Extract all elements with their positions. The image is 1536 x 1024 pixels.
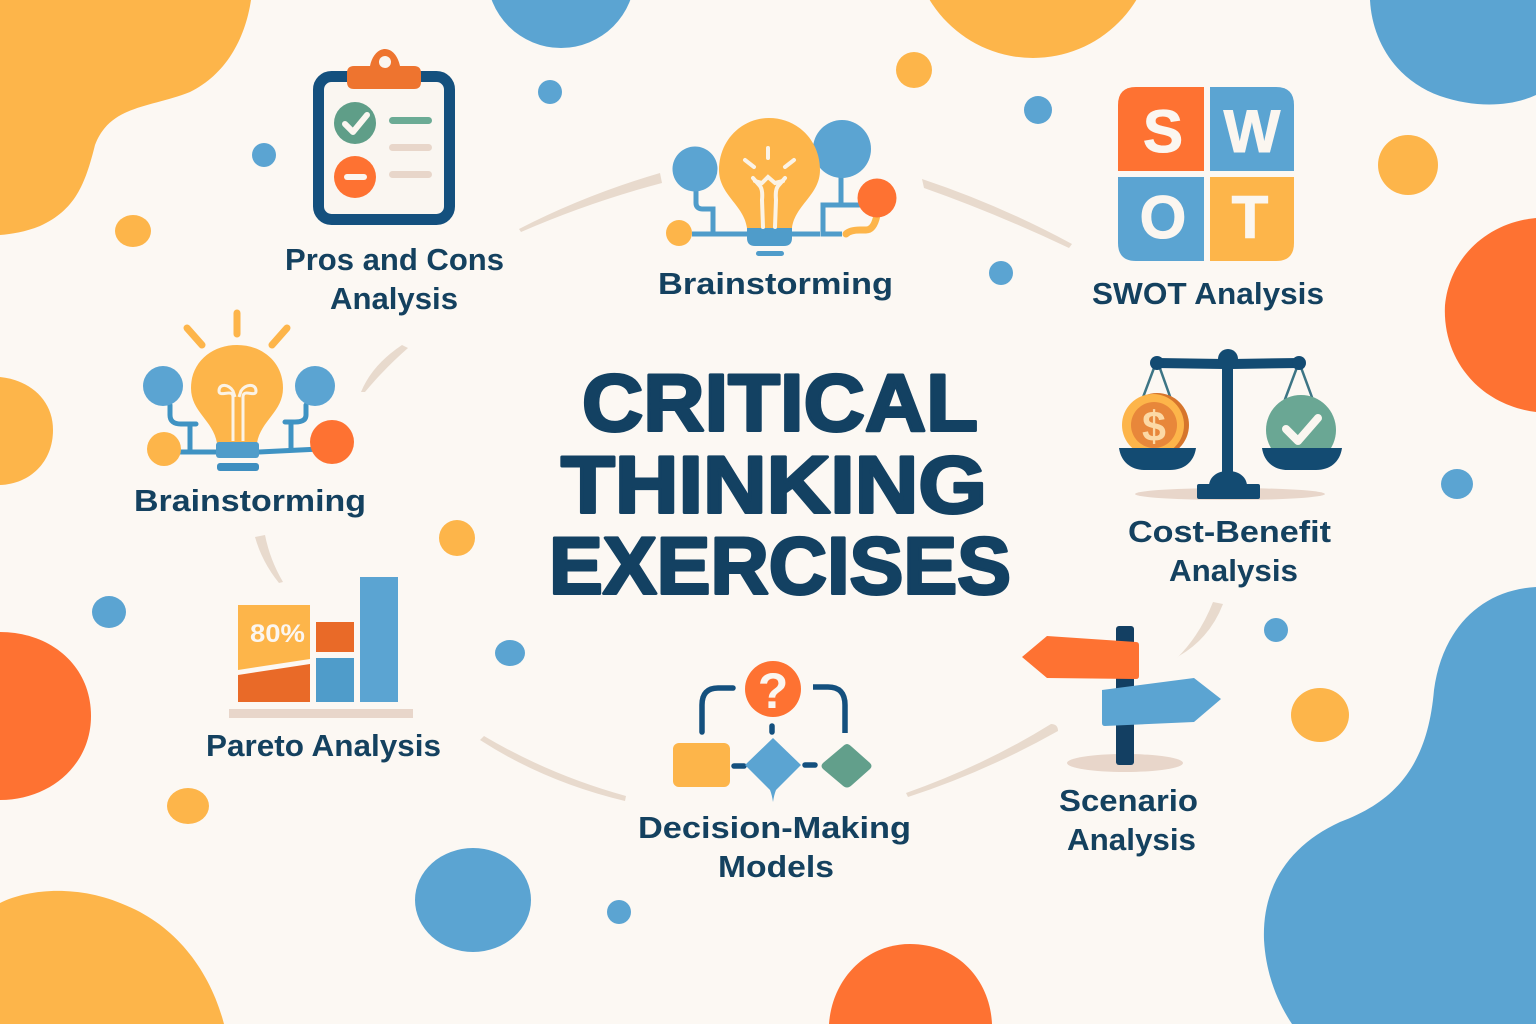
icon: SWOT grid: T — [1232, 184, 1268, 251]
icon: Pareto bar chart — [229, 577, 413, 718]
icon: clipboard — [318, 49, 450, 220]
icon: decision flowchart: ? — [758, 663, 788, 719]
connector arcs — [255, 173, 1223, 801]
icon: Pareto bar chart: 80% — [250, 620, 305, 648]
title: CRITICAL — [582, 358, 978, 448]
icon: signpost — [1022, 626, 1221, 772]
title — [549, 358, 1011, 612]
label: SWOT Analysis: SWOT Analysis — [1092, 276, 1324, 311]
icon: balance scale: $ — [1142, 403, 1166, 451]
icon: decision flowchart — [673, 661, 872, 802]
icon: SWOT grid — [1118, 87, 1294, 261]
background dots — [92, 52, 1473, 924]
label: Pros and Cons Analysis — [285, 242, 504, 316]
label: Pareto Analysis: Pareto Analysis — [206, 728, 441, 763]
label: Pros and Cons Analysis: Pros and Cons — [285, 242, 504, 277]
icon: balance scale — [1119, 349, 1342, 500]
label: Cost-Benefit Analysis — [1128, 514, 1331, 588]
icon: lightbulb network left — [143, 313, 354, 471]
label: Scenario Analysis — [1059, 783, 1198, 857]
label: Brainstorming top: Brainstorming — [658, 266, 893, 301]
title: EXERCISES — [549, 522, 1011, 612]
icon: SWOT grid: W — [1224, 98, 1281, 165]
label: Pros and Cons Analysis: Analysis — [330, 281, 458, 316]
label: Decision-Making Models: Decision-Making — [638, 810, 911, 845]
icon: lightbulb network top — [666, 118, 896, 256]
label: Decision-Making Models: Models — [718, 849, 834, 884]
label: Cost-Benefit Analysis: Analysis — [1169, 553, 1298, 588]
icon: SWOT grid: O — [1140, 184, 1186, 251]
label: Brainstorming left: Brainstorming — [134, 483, 366, 518]
label: Scenario Analysis: Scenario — [1059, 783, 1198, 818]
label: Scenario Analysis: Analysis — [1067, 822, 1196, 857]
label: Decision-Making Models — [638, 810, 911, 884]
icon: SWOT grid: S — [1143, 98, 1183, 165]
title: THINKING — [561, 440, 987, 530]
label: Cost-Benefit Analysis: Cost-Benefit — [1128, 514, 1331, 549]
